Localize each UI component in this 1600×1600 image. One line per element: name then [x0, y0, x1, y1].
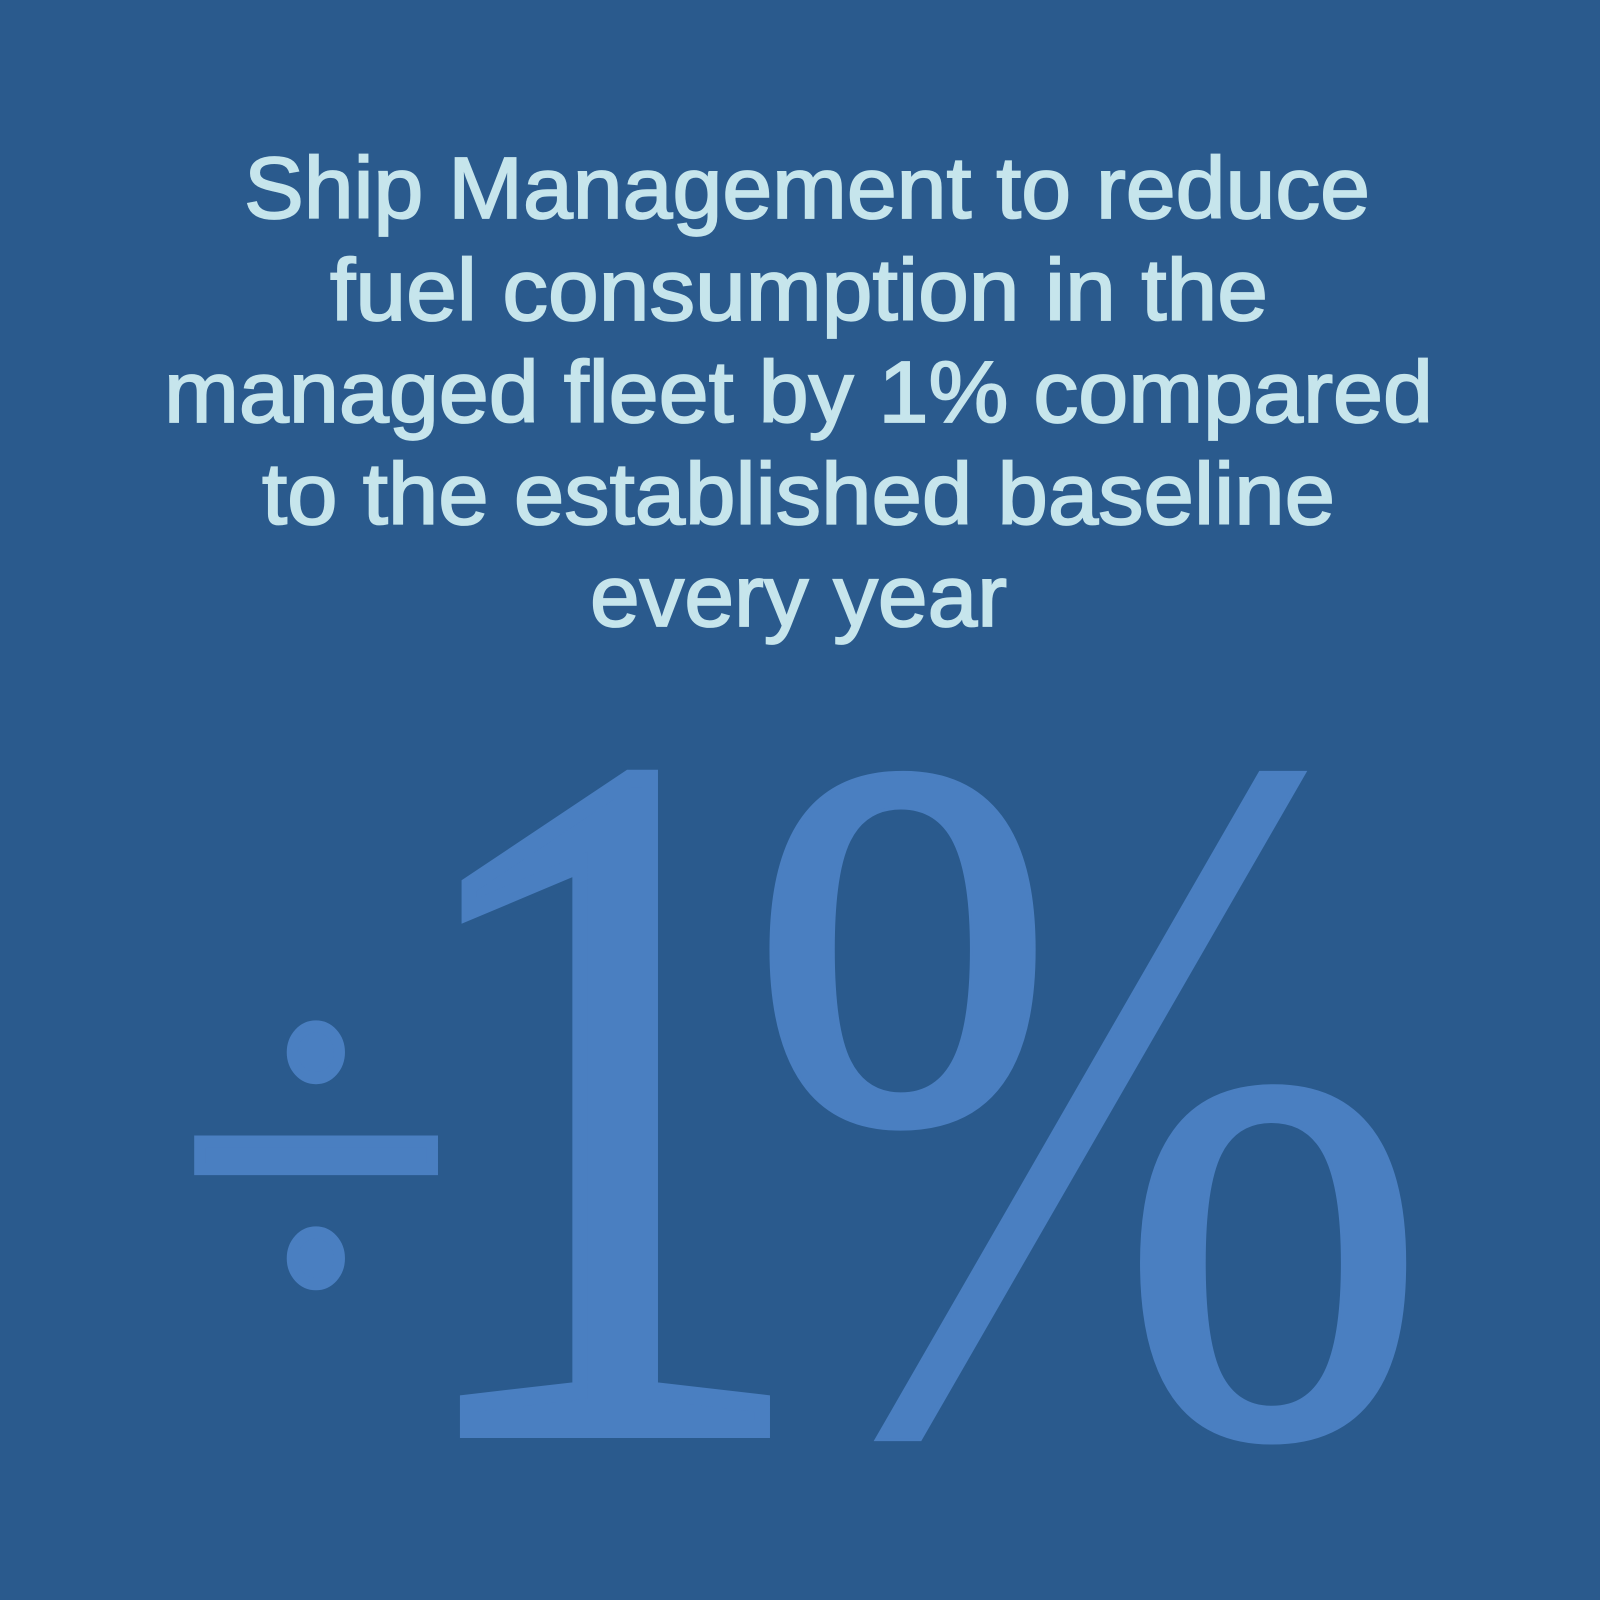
- title line 2: fuel consumption in the: [330, 242, 1268, 339]
- title line 4: to the established baseline: [262, 446, 1335, 543]
- title line 3: managed fleet by 1% compared: [164, 344, 1433, 441]
- divide sign: ÷: [179, 847, 453, 1458]
- title line 5: every year: [590, 548, 1007, 645]
- title line 1: Ship Management to reduce: [244, 140, 1370, 237]
- title: [164, 140, 1433, 645]
- big statistic: divide sign, 1 and percent: [179, 550, 1433, 1600]
